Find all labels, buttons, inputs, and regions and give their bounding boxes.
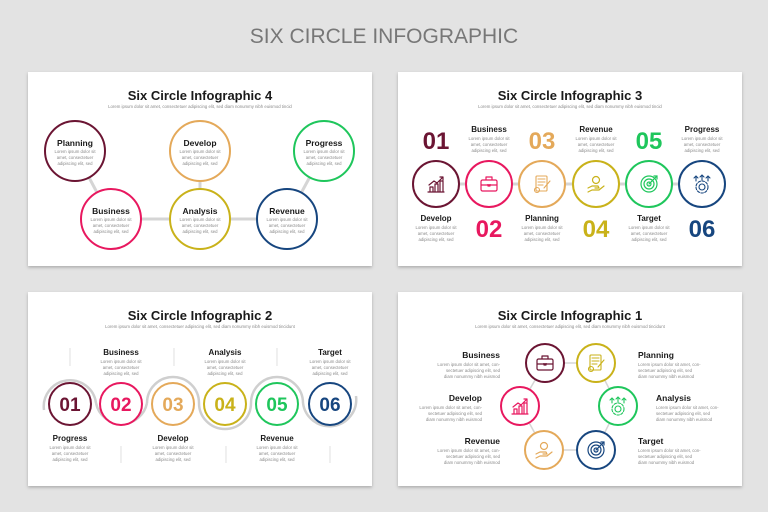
panel: infographic 2: 04 — [214, 395, 236, 416]
panel: infographic 4: amet, consectetuer — [182, 223, 219, 228]
panel: infographic 1: Revenue — [465, 436, 500, 446]
panel: infographic 1: Analysis — [656, 393, 691, 403]
panel: infographic 2: Analysis — [209, 348, 242, 357]
panel: infographic 1: diam nonummy nibh euismod — [444, 460, 501, 465]
panel: infographic 4: Revenue — [269, 206, 305, 216]
panel: infographic 4: Business — [92, 206, 130, 216]
heading 3: Six Circle Infographic 3 — [498, 88, 642, 103]
numbers 3: 06 — [689, 216, 715, 243]
heading 4: Six Circle Infographic 4 — [128, 88, 273, 103]
panel: infographic 3 — [398, 72, 742, 266]
panel: infographic 1: diam nonummy nibh euismod — [656, 417, 713, 422]
panel: infographic 4: amet, consectetuer — [306, 155, 343, 160]
panel: infographic 4: adipiscing elit, sed — [57, 161, 93, 166]
panel: infographic 1: Lorem ipsum dolor sit amet, con- — [437, 362, 501, 367]
panel: infographic 3: Target — [637, 214, 661, 223]
panel: infographic 3: Progress — [685, 125, 720, 134]
panel: infographic 1: Lorem ipsum dolor sit amet, con- — [638, 448, 701, 453]
panel: infographic 3: Planning — [525, 214, 559, 223]
panel: infographic 3: Lorem ipsum dolor sit — [681, 136, 723, 141]
panel: infographic 1: diam nonummy nibh euismod — [638, 374, 695, 379]
panel: infographic 2: 06 — [319, 395, 341, 416]
panel: infographic 1: Target — [638, 436, 664, 446]
panel: infographic 2: Target — [318, 348, 342, 357]
panel: infographic 1: diam nonummy nibh euismod — [426, 417, 483, 422]
panel: infographic 3: Lorem ipsum dolor sit — [628, 225, 670, 230]
panel: infographic 2 — [28, 292, 372, 486]
panel: infographic 1: diam nonummy nibh euismod — [444, 374, 501, 379]
panel: infographic 4: adipiscing elit, sed — [269, 229, 305, 234]
panel: infographic 3: Lorem ipsum dolor sit — [521, 225, 563, 230]
panel: infographic 2: adipiscing elit, sed — [103, 371, 139, 376]
panel: infographic 4: amet, consectetuer — [269, 223, 306, 228]
panel: infographic 2: amet, consectetuer — [259, 451, 296, 456]
panel: infographic 4: amet, consectetuer — [57, 155, 94, 160]
panel: infographic 3: amet, consectetuer — [578, 142, 615, 147]
panel: infographic 3: adipiscing elit, sed — [418, 237, 454, 242]
panel: infographic 4: Analysis — [183, 206, 218, 216]
panel: infographic 4: Lorem ipsum dolor sit — [179, 217, 221, 222]
panel: infographic 4 — [28, 72, 372, 266]
panel: infographic 2: amet, consectetuer — [52, 451, 89, 456]
panel: infographic 4: Lorem ipsum dolor sit — [303, 149, 345, 154]
panel: infographic 4: Planning — [57, 138, 93, 148]
panel: infographic 2: 01 — [59, 395, 81, 416]
panel: infographic 1: Lorem ipsum dolor sit amet, con- — [437, 448, 501, 453]
panel: infographic 1: sectetuer adipiscing elit, sed — [638, 368, 693, 373]
main title: SIX CIRCLE INFOGRAPHIC — [250, 25, 518, 48]
panel: infographic 2: Revenue — [260, 434, 294, 443]
panel: infographic 2: Lorem ipsum dolor sit — [309, 359, 351, 364]
panel: infographic 4: Develop — [183, 138, 217, 148]
panel: infographic 3: adipiscing elit, sed — [684, 148, 720, 153]
panel: infographic 1: sectetuer adipiscing elit, sed — [446, 368, 501, 373]
panel: infographic 3: Revenue — [579, 125, 613, 134]
panel: infographic 2: 03 — [162, 395, 184, 416]
panel: infographic 3: Develop — [420, 214, 452, 223]
panel: infographic 3: Lorem ipsum dolor sit — [415, 225, 457, 230]
panel: infographic 4: Progress — [306, 138, 343, 148]
heading 1: Six Circle Infographic 1 — [498, 308, 642, 323]
numbers 3: 02 — [476, 216, 502, 243]
panel: infographic 1 — [398, 292, 742, 486]
panel: infographic 2: adipiscing elit, sed — [312, 371, 348, 376]
numbers 3: 05 — [636, 128, 662, 155]
panel: infographic 1: sectetuer adipiscing elit, sed — [638, 454, 693, 459]
panel: infographic 2: Progress — [53, 434, 88, 443]
panel: infographic 4: adipiscing elit, sed — [306, 161, 342, 166]
panel: infographic 4: Lorem ipsum dolor sit amet, consectetuer adipiscing elit, sed diam nonummy nibh euismod tincid — [108, 104, 292, 109]
panel: infographic 2: Lorem ipsum dolor sit — [204, 359, 246, 364]
panel: infographic 1: Lorem ipsum dolor sit amet, con- — [656, 405, 719, 410]
panel: infographic 4: Lorem ipsum dolor sit — [179, 149, 221, 154]
icon circles 3 — [413, 161, 725, 207]
panel: infographic 1: Develop — [449, 393, 482, 403]
panel: infographic 3: amet, consectetuer — [684, 142, 721, 147]
panel: infographic 3: amet, consectetuer — [418, 231, 455, 236]
panel: infographic 3: Lorem ipsum dolor sit — [575, 136, 617, 141]
panel: infographic 4: Lorem ipsum dolor sit — [90, 217, 132, 222]
panel: infographic 4: adipiscing elit, sed — [93, 229, 129, 234]
panel: infographic 2: Business — [103, 348, 139, 357]
panel: infographic 3: adipiscing elit, sed — [471, 148, 507, 153]
panel: infographic 3: Lorem ipsum dolor sit amet, consectetuer adipiscing elit, sed diam nonummy nibh euismod tincid — [478, 104, 662, 109]
panel: infographic 3: Lorem ipsum dolor sit — [468, 136, 510, 141]
panel: infographic 4: Lorem ipsum dolor sit — [266, 217, 308, 222]
circle nodes 4 — [45, 121, 354, 249]
panel: infographic 2: amet, consectetuer — [312, 365, 349, 370]
panel: infographic 2: amet, consectetuer — [103, 365, 140, 370]
panel: infographic 3: adipiscing elit, sed — [524, 237, 560, 242]
numbers 3: 03 — [529, 128, 555, 155]
panel: infographic 1: diam nonummy nibh euismod — [638, 460, 695, 465]
panel: infographic 2: 02 — [110, 395, 132, 416]
panel: infographic 1: Planning — [638, 350, 674, 360]
panel: infographic 2: Lorem ipsum dolor sit — [100, 359, 142, 364]
panel: infographic 2: amet, consectetuer — [155, 451, 192, 456]
panel: infographic 4: amet, consectetuer — [182, 155, 219, 160]
panel: infographic 4: amet, consectetuer — [93, 223, 130, 228]
panel: infographic 2: Develop — [157, 434, 189, 443]
panel: infographic 1: Lorem ipsum dolor sit amet, con- — [419, 405, 483, 410]
panel: infographic 1: sectetuer adipiscing elit, sed — [428, 411, 483, 416]
panel: infographic 3: Business — [471, 125, 507, 134]
panel: infographic 1: Business — [462, 350, 500, 360]
panel: infographic 4: Lorem ipsum dolor sit — [54, 149, 96, 154]
panel: infographic 4: adipiscing elit, sed — [182, 229, 218, 234]
panel: infographic 3: amet, consectetuer — [524, 231, 561, 236]
panel: infographic 3: amet, consectetuer — [631, 231, 668, 236]
panel: infographic 2: Lorem ipsum dolor sit — [256, 445, 298, 450]
panel: infographic 3: adipiscing elit, sed — [578, 148, 614, 153]
panel: infographic 2: adipiscing elit, sed — [259, 457, 295, 462]
hexagon circles 1 — [501, 344, 637, 469]
panel: infographic 2: adipiscing elit, sed — [207, 371, 243, 376]
panel: infographic 2: adipiscing elit, sed — [52, 457, 88, 462]
panel: infographic 1: Lorem ipsum dolor sit amet, con- — [638, 362, 701, 367]
panel: infographic 1: sectetuer adipiscing elit, sed — [656, 411, 711, 416]
numbers 3: 04 — [583, 216, 610, 243]
panel: infographic 3: amet, consectetuer — [471, 142, 508, 147]
panel: infographic 2: Lorem ipsum dolor sit — [49, 445, 91, 450]
panel: infographic 2: Lorem ipsum dolor sit — [152, 445, 194, 450]
panel: infographic 1: sectetuer adipiscing elit, sed — [446, 454, 501, 459]
panel: infographic 2: 05 — [266, 395, 288, 416]
numbers 3: 01 — [423, 128, 449, 155]
panel: infographic 2: Lorem ipsum dolor sit amet, consectetuer adipiscing elit, sed diam nonummy nibh euismod tincidunt — [105, 324, 296, 329]
panel: infographic 4: adipiscing elit, sed — [182, 161, 218, 166]
panel: infographic 2: amet, consectetuer — [207, 365, 244, 370]
panel: infographic 2: adipiscing elit, sed — [155, 457, 191, 462]
number circles 2 — [49, 383, 351, 425]
panel: infographic 3: adipiscing elit, sed — [631, 237, 667, 242]
heading 2: Six Circle Infographic 2 — [128, 308, 272, 323]
numbers 3 — [423, 128, 715, 243]
panel: infographic 1: Lorem ipsum dolor sit amet, consectetuer adipiscing elit, sed diam nonummy nibh euismod tincidunt — [475, 324, 666, 329]
